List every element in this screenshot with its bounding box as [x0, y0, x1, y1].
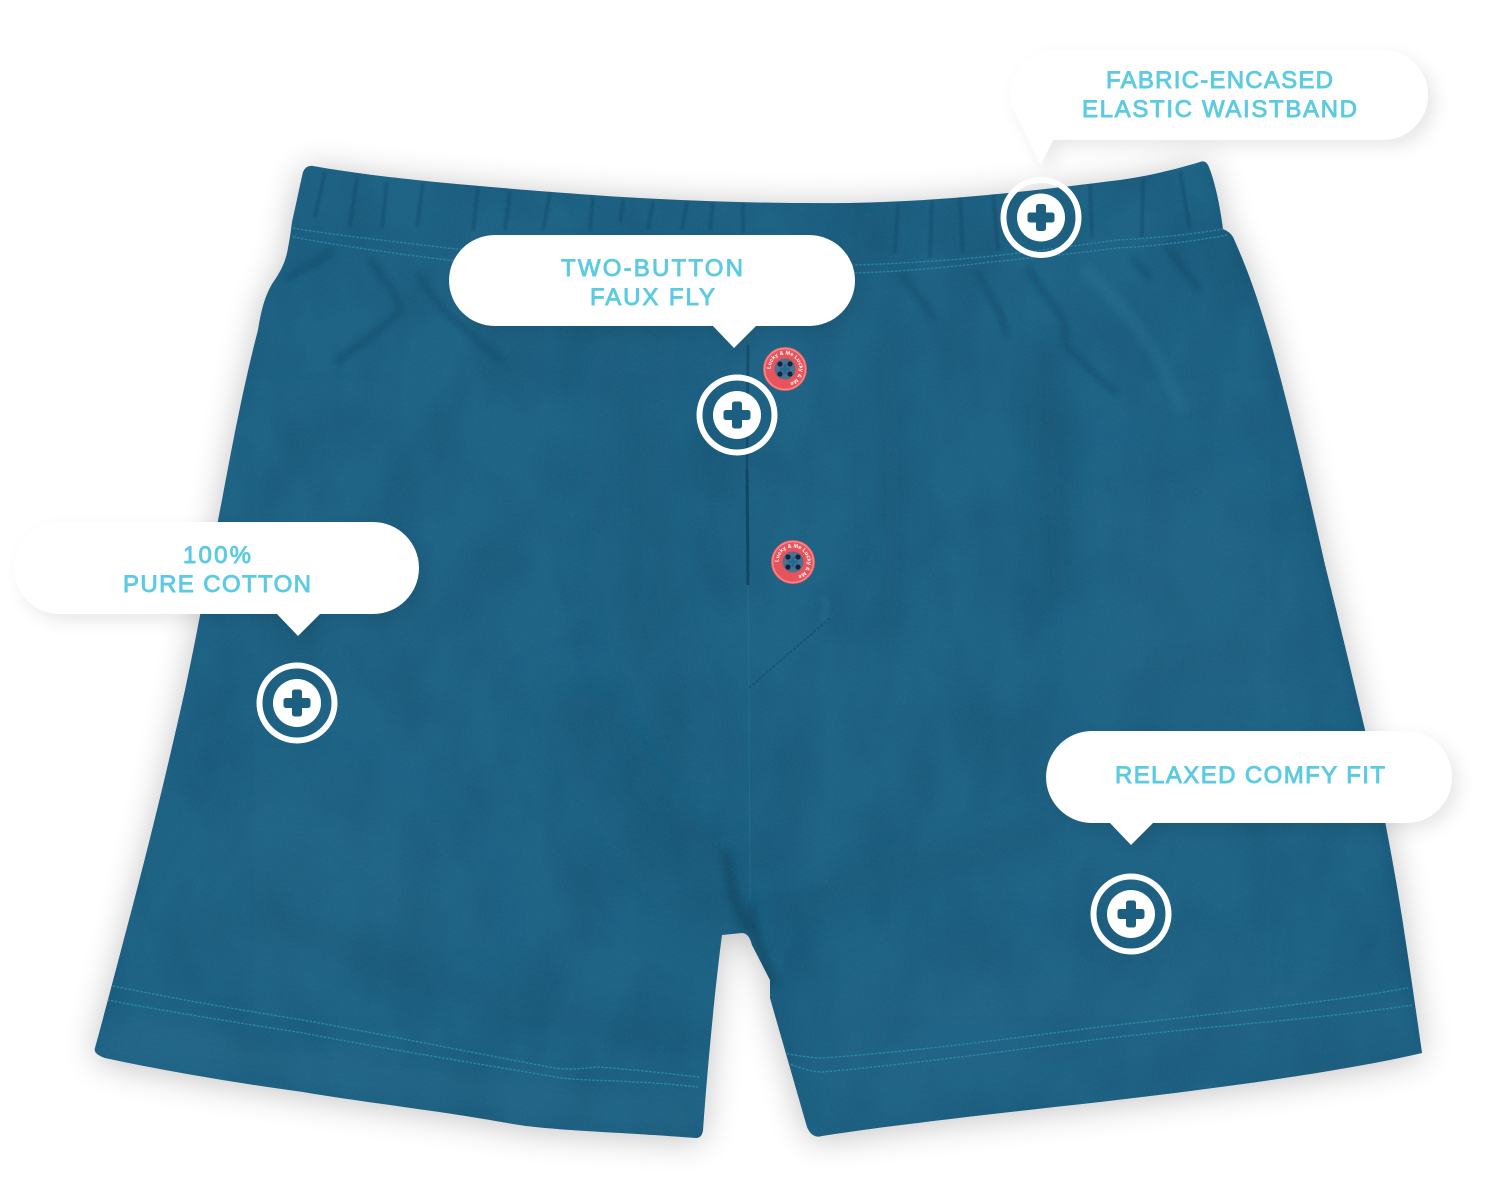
- marker: faux fly: [700, 378, 774, 452]
- fabric knit texture: [90, 160, 1430, 1145]
- fabric shading and folds: [90, 165, 1422, 1140]
- button: upper: [763, 347, 807, 391]
- hem stitching: [107, 985, 1412, 1087]
- callout: faux fly: [449, 235, 855, 348]
- callout text: cotton: [123, 542, 311, 598]
- callout text: cotton: PURE COTTON: [123, 571, 311, 598]
- soft shadow under shorts: [95, 164, 1422, 1141]
- button: lower: [771, 540, 815, 584]
- fly placket: [747, 345, 830, 900]
- callout text: waistband: ELASTIC WAISTBAND: [1082, 96, 1357, 123]
- button: lower: Lucky & Me Lucky & Me: [774, 544, 812, 578]
- callout: cotton: [14, 522, 419, 636]
- callout text: cotton: 100%: [183, 542, 251, 569]
- callout text: waistband: FABRIC-ENCASED: [1106, 67, 1333, 94]
- callout text: faux fly: TWO-BUTTON: [561, 255, 743, 282]
- marker: fit: [1094, 876, 1168, 952]
- boxer shorts garment: [90, 160, 1430, 1145]
- fabric mottling: [90, 160, 1430, 1145]
- callout text: fit: RELAXED COMFY FIT: [1115, 762, 1385, 789]
- callout text: waistband: [1082, 67, 1357, 123]
- button: upper: Lucky & Me Lucky & Me: [766, 350, 804, 385]
- waistband gathers: [315, 172, 1190, 258]
- callout text: faux fly: [561, 255, 743, 311]
- callout text: faux fly: FAUX FLY: [590, 284, 715, 311]
- callout: fit: [1046, 731, 1452, 845]
- callout: waistband: [1011, 50, 1428, 165]
- fold lines below waistband: [288, 247, 1200, 393]
- waistband stitching: [293, 228, 1227, 273]
- marker: cotton: [260, 666, 334, 740]
- marker: waistband: [1004, 180, 1078, 255]
